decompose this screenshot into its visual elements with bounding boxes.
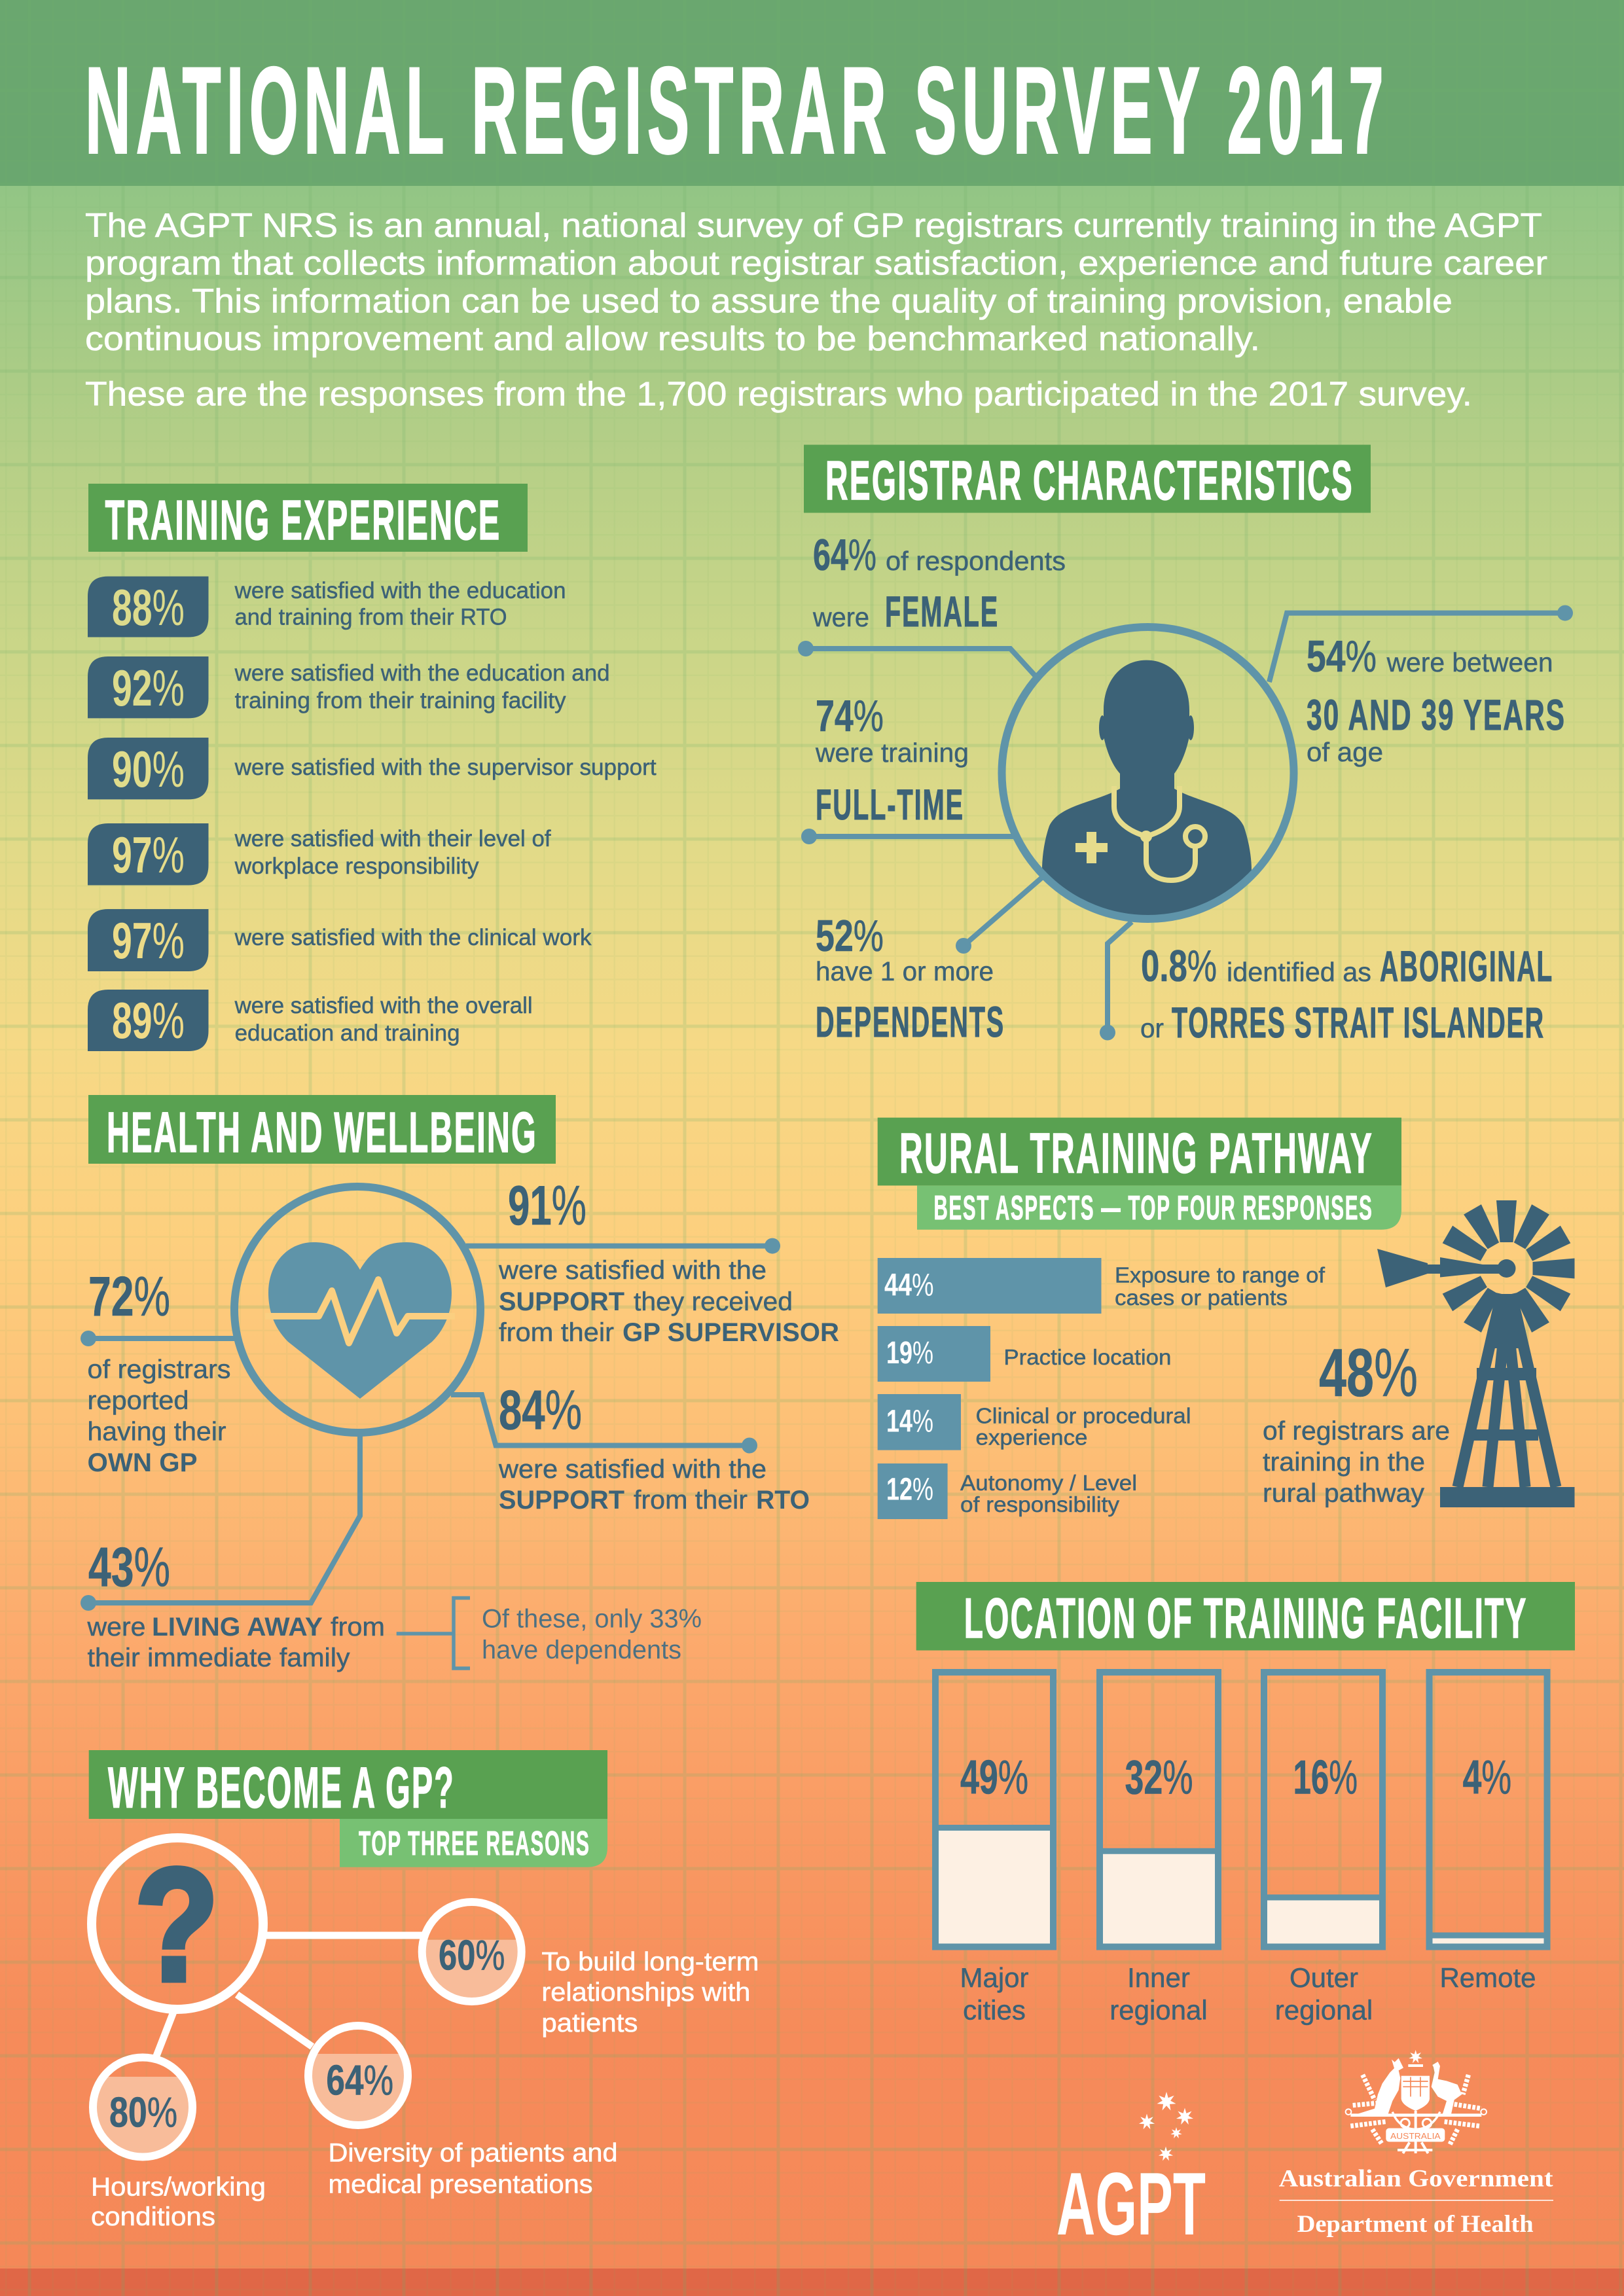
stat: 48% rural pathway: training in the — [1263, 1448, 1425, 1477]
chart: remote 4%: 4% — [1463, 1751, 1511, 1804]
connector lines — [798, 605, 1573, 1041]
connector lines — [156, 1935, 424, 2058]
stat: 54% age: 54% — [1307, 632, 1377, 681]
intro text — [85, 207, 1547, 414]
stat: 43% living away: their immediate family — [88, 1643, 350, 1672]
stat: 92%: 92% — [112, 660, 185, 717]
chart: inner regional 32%: 32% — [1125, 1751, 1193, 1804]
stat: 97% clinical: were satisfied with the clinical work — [234, 925, 592, 950]
bar: 12% autonomy: 12% — [886, 1472, 933, 1507]
chart: outer regional 16% — [1264, 1672, 1382, 2025]
stat: 92%: were satisfied with the education and — [234, 660, 610, 686]
stat: 48% rural pathway: 48% — [1319, 1335, 1418, 1411]
icon: doctor in circle — [1001, 627, 1293, 929]
stat: 52% dependents: have 1 or more — [816, 956, 994, 986]
stat: 90%: were satisfied with the supervisor support — [234, 755, 657, 780]
stat: 92%: training from their training facility — [235, 688, 566, 713]
stat: 92% — [88, 656, 610, 718]
panel: rural training pathway — [878, 1118, 1575, 1519]
stat: 91% supervisor support: they received — [634, 1287, 793, 1316]
stat: 48% rural pathway — [1263, 1335, 1450, 1508]
bar: 12% autonomy — [878, 1463, 1137, 1519]
stat: 64% diversity: 64% — [326, 2057, 393, 2104]
stat: 89%: education and training — [235, 1020, 460, 1046]
stat: 91% supervisor support: GP SUPERVISOR — [623, 1318, 839, 1347]
text: Department of Health: Department of Health — [1297, 2211, 1534, 2238]
icon: coat of arms: AUSTRALIA — [1390, 2132, 1441, 2141]
stat: 43% living away: were — [86, 1613, 145, 1641]
stat: 74% full-time: 74% — [816, 691, 884, 741]
stat: 64% female: FEMALE — [885, 587, 999, 636]
icon: question mark in circle: ? — [135, 1835, 219, 2014]
bar: 44% exposure: 44% — [884, 1268, 933, 1303]
chart: inner regional 32% — [1100, 1672, 1218, 2025]
heading: rural training pathway — [878, 1118, 1401, 1185]
heading: health and wellbeing: HEALTH AND WELLBEING — [107, 1101, 537, 1164]
panel: registrar characteristics — [798, 445, 1573, 1047]
chart: inner regional 32%: regional — [1110, 1995, 1208, 2025]
stat: 64% female — [812, 530, 1066, 636]
stat: 80% hours: Hours/working — [91, 2172, 266, 2201]
stat: 72% own GP — [88, 1265, 230, 1477]
stat: 72% own GP: of registrars — [88, 1355, 230, 1384]
stat: 97% clinical — [88, 909, 592, 971]
bar: 12% autonomy: Autonomy / Level — [960, 1471, 1137, 1495]
stat: 52% dependents — [816, 910, 1005, 1046]
stat: 0.8% aboriginal or torres strait islander: 0.8% — [1141, 941, 1217, 991]
bar: 19% practice location: 19% — [886, 1335, 933, 1370]
bar: 14% clinical or procedural: experience — [975, 1425, 1088, 1449]
stat: 91% supervisor support: 91% — [508, 1174, 586, 1236]
stat: 54% age — [1307, 632, 1566, 767]
stat: 72% own GP: OWN GP — [88, 1448, 198, 1477]
stat: 84% RTO support — [498, 1379, 810, 1515]
callout: bracket note: have dependents — [482, 1636, 681, 1664]
stat: 48% rural pathway: rural pathway — [1263, 1479, 1424, 1508]
stat: 74% full-time: FULL-TIME — [816, 780, 964, 829]
stat: 72% own GP: reported — [88, 1386, 189, 1415]
stat: 0.8% aboriginal or torres strait islander: identified as — [1227, 957, 1371, 987]
chart: outer regional 16%: 16% — [1293, 1751, 1358, 1804]
heading: training experience — [88, 484, 528, 552]
icon: heart with pulse in circle — [234, 1187, 480, 1433]
chart: major cities 49%: cities — [963, 1995, 1026, 2025]
stat: 43% living away: 43% — [88, 1535, 170, 1598]
callout: bracket note: Of these, only 33% — [482, 1605, 702, 1634]
subheading: best aspects — [917, 1185, 1401, 1230]
stat: 54% age: of age — [1307, 737, 1383, 767]
stat: 52% dependents: DEPENDENTS — [816, 997, 1005, 1046]
logo: Australian Government Department of Health — [1279, 2050, 1553, 2238]
stat: 88%: and training from their RTO — [235, 605, 507, 630]
stat: 89%: were satisfied with the overall — [234, 993, 533, 1018]
stat: 97% workplace: were satisfied with their level of — [234, 826, 551, 852]
intro text: program that collects information about registrar satisfaction, experience and future career — [85, 245, 1547, 283]
stat: 91% supervisor support — [498, 1174, 839, 1347]
stat: 64% female: of respondents — [886, 546, 1066, 576]
intro text: The AGPT NRS is an annual, national survey of GP registrars currently training in the AGPT — [85, 207, 1542, 245]
stat: 60% relationships: 60% — [439, 1932, 505, 1979]
panel: health and wellbeing — [81, 1095, 839, 1672]
intro text: These are the responses from the 1,700 registrars who participated in the 2017 survey. — [85, 376, 1472, 414]
stat: 97% workplace: workplace responsibility — [234, 853, 479, 879]
panel: training experience — [88, 484, 657, 1051]
stat: 60% relationships: To build long-term — [541, 1948, 759, 1977]
stat: 90%: 90% — [112, 742, 185, 798]
connector lines — [81, 1238, 780, 1611]
chart: major cities 49%: Major — [960, 1962, 1029, 1993]
icon: coat of arms — [1346, 2050, 1487, 2153]
bar: 14% clinical or procedural — [878, 1394, 1191, 1450]
stat: 97% clinical: 97% — [112, 913, 185, 969]
stat: 60% relationships: relationships with — [541, 1978, 750, 2007]
heading: why become a GP: WHY BECOME A GP? — [108, 1755, 455, 1820]
stat: 64% diversity: Diversity of patients and — [329, 2138, 618, 2167]
stat: 88% — [88, 577, 566, 637]
stat: 52% dependents: 52% — [816, 910, 884, 961]
logo: AGPT — [1056, 2092, 1206, 2253]
stat: 64% female: 64% — [813, 530, 876, 580]
stat: 88%: 88% — [112, 580, 185, 636]
logo: AGPT: AGPT — [1056, 2154, 1206, 2253]
bar: 44% exposure: Exposure to range of — [1115, 1263, 1326, 1287]
bar: 44% exposure — [878, 1258, 1326, 1314]
stat: 74% full-time: were training — [815, 738, 969, 768]
stat: 0.8% aboriginal or torres strait islander — [1140, 941, 1553, 1047]
stat: 60% relationships — [419, 1902, 759, 2037]
stat: 90% — [88, 738, 657, 799]
stat: 91% supervisor support: from their — [499, 1318, 614, 1347]
callout: bracket note — [397, 1598, 702, 1668]
bar: 14% clinical or procedural: 14% — [886, 1404, 933, 1439]
icon: question mark in circle — [92, 1835, 263, 2014]
heading: registrar characteristics — [804, 445, 1371, 513]
bar: 12% autonomy: of responsibility — [960, 1492, 1120, 1516]
chart: major cities 49%: 49% — [960, 1751, 1028, 1804]
stat: 43% living away: LIVING AWAY — [152, 1613, 323, 1641]
text: Australian Government: Australian Government — [1279, 2166, 1553, 2193]
stat: 91% supervisor support: SUPPORT — [499, 1287, 624, 1316]
intro text: continuous improvement and allow results to be benchmarked nationally. — [85, 320, 1260, 358]
stat: 91% supervisor support: were satisfied with the — [498, 1256, 767, 1285]
intro text: plans. This information can be used to assure the quality of training provision, enable — [85, 283, 1453, 321]
stat: 0.8% aboriginal or torres strait islander: or — [1140, 1013, 1164, 1043]
chart: major cities 49% — [935, 1672, 1053, 2025]
stat: 64% female: were — [812, 602, 869, 632]
icon: windmill — [1377, 1200, 1575, 1507]
stat: 89%: 89% — [112, 993, 185, 1049]
bar: 19% practice location — [878, 1326, 1171, 1382]
chart: remote 4%: Remote — [1439, 1962, 1536, 1993]
chart: remote 4% — [1430, 1672, 1547, 1993]
stat: 80% hours — [90, 2058, 266, 2231]
stat: 84% RTO support: were satisfied with the — [498, 1455, 767, 1484]
chart: outer regional 16%: regional — [1275, 1995, 1373, 2025]
heading: health and wellbeing — [88, 1095, 556, 1164]
stat: 97% workplace — [88, 823, 551, 885]
stat: 43% living away — [86, 1535, 385, 1672]
bar: 14% clinical or procedural: Clinical or procedural — [975, 1403, 1191, 1427]
stat: 80% hours: conditions — [91, 2202, 215, 2231]
bar: 44% exposure: cases or patients — [1115, 1285, 1288, 1310]
stat: 84% RTO support: 84% — [499, 1379, 582, 1441]
heading: training experience: TRAINING EXPERIENCE — [105, 490, 501, 552]
subheading: top three reasons: TOP THREE REASONS — [359, 1825, 590, 1863]
panel: location of training facility — [916, 1582, 1575, 2025]
chart: outer regional 16%: Outer — [1290, 1962, 1358, 1993]
stat: 72% own GP: having their — [88, 1418, 226, 1446]
stat: 74% full-time — [815, 691, 969, 829]
panel: why become a GP — [89, 1750, 759, 2231]
stat: 84% RTO support: from their — [634, 1486, 748, 1515]
chart: inner regional 32%: Inner — [1127, 1962, 1190, 1993]
stat: 89% — [88, 990, 533, 1051]
stat: 54% age: were between — [1386, 647, 1553, 677]
subheading: top three reasons — [340, 1819, 607, 1867]
stat: 88%: were satisfied with the education — [234, 578, 566, 603]
stat: 48% rural pathway: of registrars are — [1263, 1417, 1450, 1446]
stat: 97% workplace: 97% — [112, 827, 185, 884]
stat: 72% own GP: 72% — [88, 1265, 170, 1327]
stat: 84% RTO support: SUPPORT — [499, 1486, 624, 1515]
stat: 84% RTO support: RTO — [756, 1486, 810, 1515]
stat: 43% living away: from — [331, 1613, 385, 1641]
stat: 64% diversity: medical presentations — [329, 2170, 593, 2199]
bar: 19% practice location: Practice location — [1003, 1345, 1171, 1369]
stat: 60% relationships: patients — [541, 2009, 638, 2037]
stat: 80% hours: 80% — [109, 2089, 177, 2136]
stat: 64% diversity — [305, 2026, 618, 2199]
